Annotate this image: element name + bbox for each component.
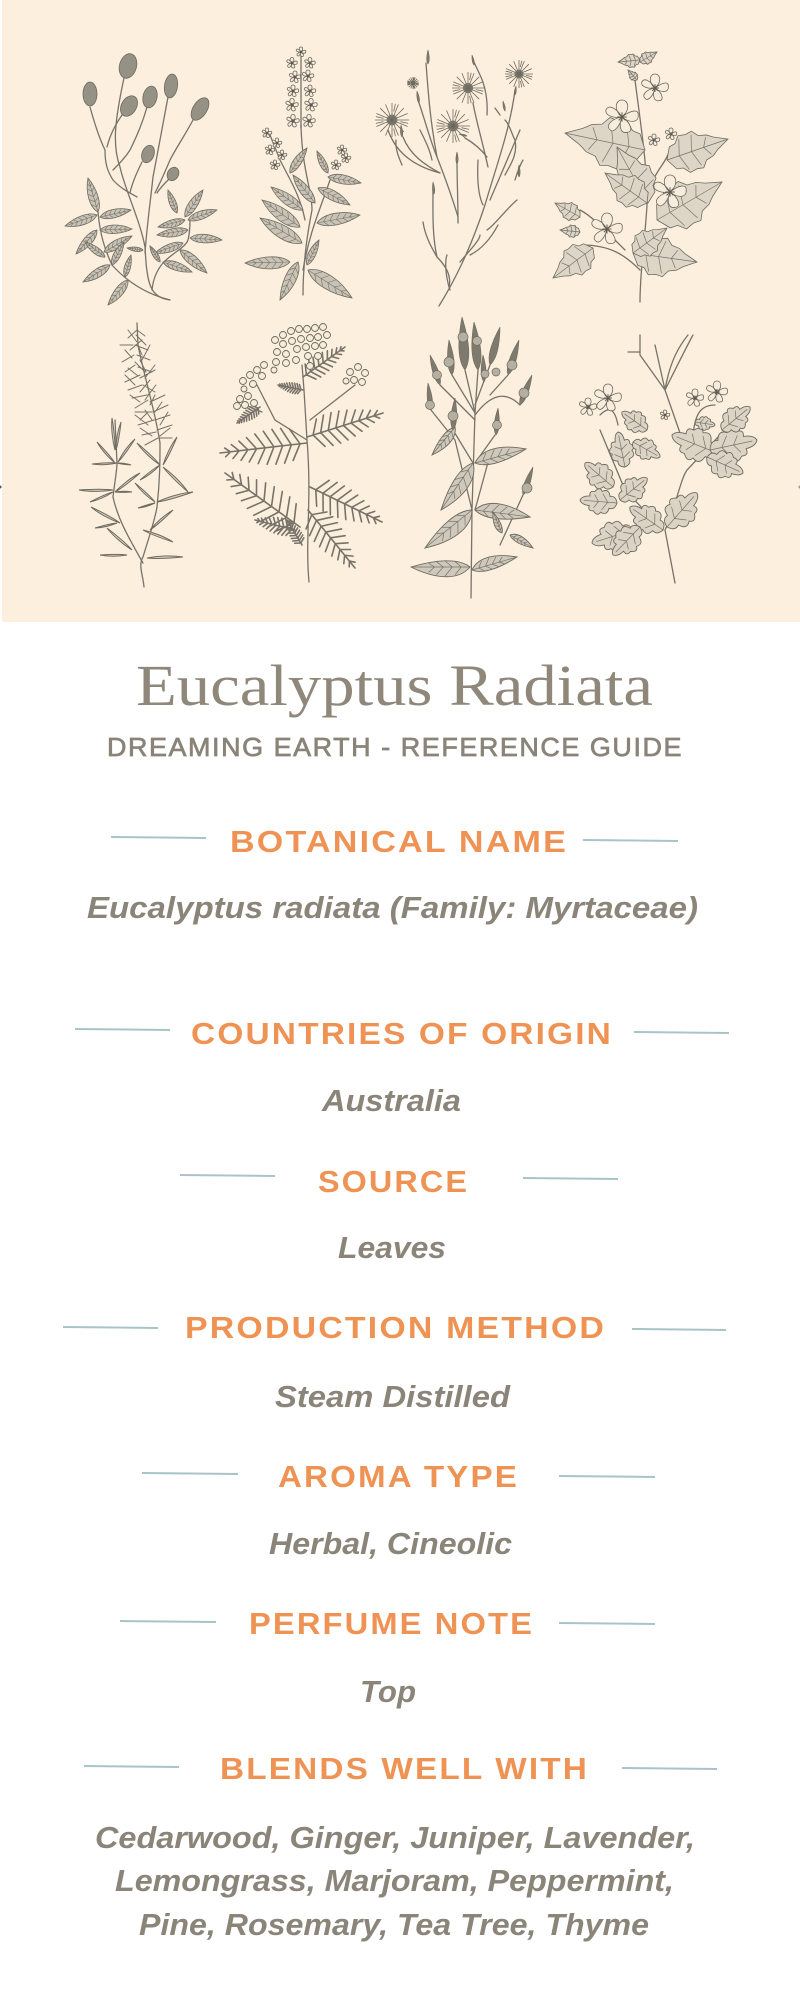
section: production method — [63, 1310, 726, 1414]
value: source: Leaves — [338, 1230, 446, 1265]
value: blends well with: Lemongrass, Marjoram, Peppermint, — [115, 1863, 674, 1898]
section: source — [180, 1164, 618, 1265]
illustration: hyssop — [79, 323, 193, 587]
illustration: sage — [245, 47, 362, 303]
illustration: tansy — [214, 324, 389, 582]
hero panel: botanical illustrations — [0, 0, 800, 622]
section: blends well with — [84, 1751, 717, 1942]
subtitle: DREAMING EARTH - REFERENCE GUIDE — [107, 732, 683, 762]
value: blends well with: Pine, Rosemary, Tea Tree, Thyme — [139, 1907, 649, 1942]
value: aroma type: Herbal, Cineolic — [269, 1526, 512, 1561]
value: production method: Steam Distilled — [275, 1379, 511, 1414]
value: botanical name: Eucalyptus radiata (Family: Myrtaceae) — [87, 890, 698, 925]
section: botanical name — [87, 824, 698, 925]
value: perfume note: Top — [360, 1674, 416, 1709]
heading: perfume note: PERFUME NOTE — [249, 1606, 534, 1641]
heading: production method: PRODUCTION METHOD — [185, 1310, 606, 1345]
value: countries of origin: Australia — [321, 1083, 461, 1118]
value: blends well with: Cedarwood, Ginger, Juniper, Lavender, — [95, 1820, 695, 1855]
illustration: celandine — [577, 335, 760, 583]
heading: countries of origin: COUNTRIES OF ORIGIN — [191, 1016, 613, 1051]
section: perfume note — [120, 1606, 655, 1709]
illustration: mallow — [544, 47, 734, 302]
heading: botanical name: BOTANICAL NAME — [230, 824, 568, 859]
section: countries of origin — [75, 1016, 729, 1118]
section: aroma type — [142, 1459, 655, 1561]
illustration: cornflower — [375, 50, 533, 306]
heading: aroma type: AROMA TYPE — [278, 1459, 519, 1494]
heading: source: SOURCE — [318, 1164, 469, 1199]
heading: blends well with: BLENDS WELL WITH — [220, 1751, 589, 1786]
illustration: burnet — [64, 52, 222, 308]
illustration: verbena — [411, 317, 536, 598]
title: Eucalyptus Radiata — [136, 653, 653, 718]
value: blends well with — [95, 1820, 695, 1942]
